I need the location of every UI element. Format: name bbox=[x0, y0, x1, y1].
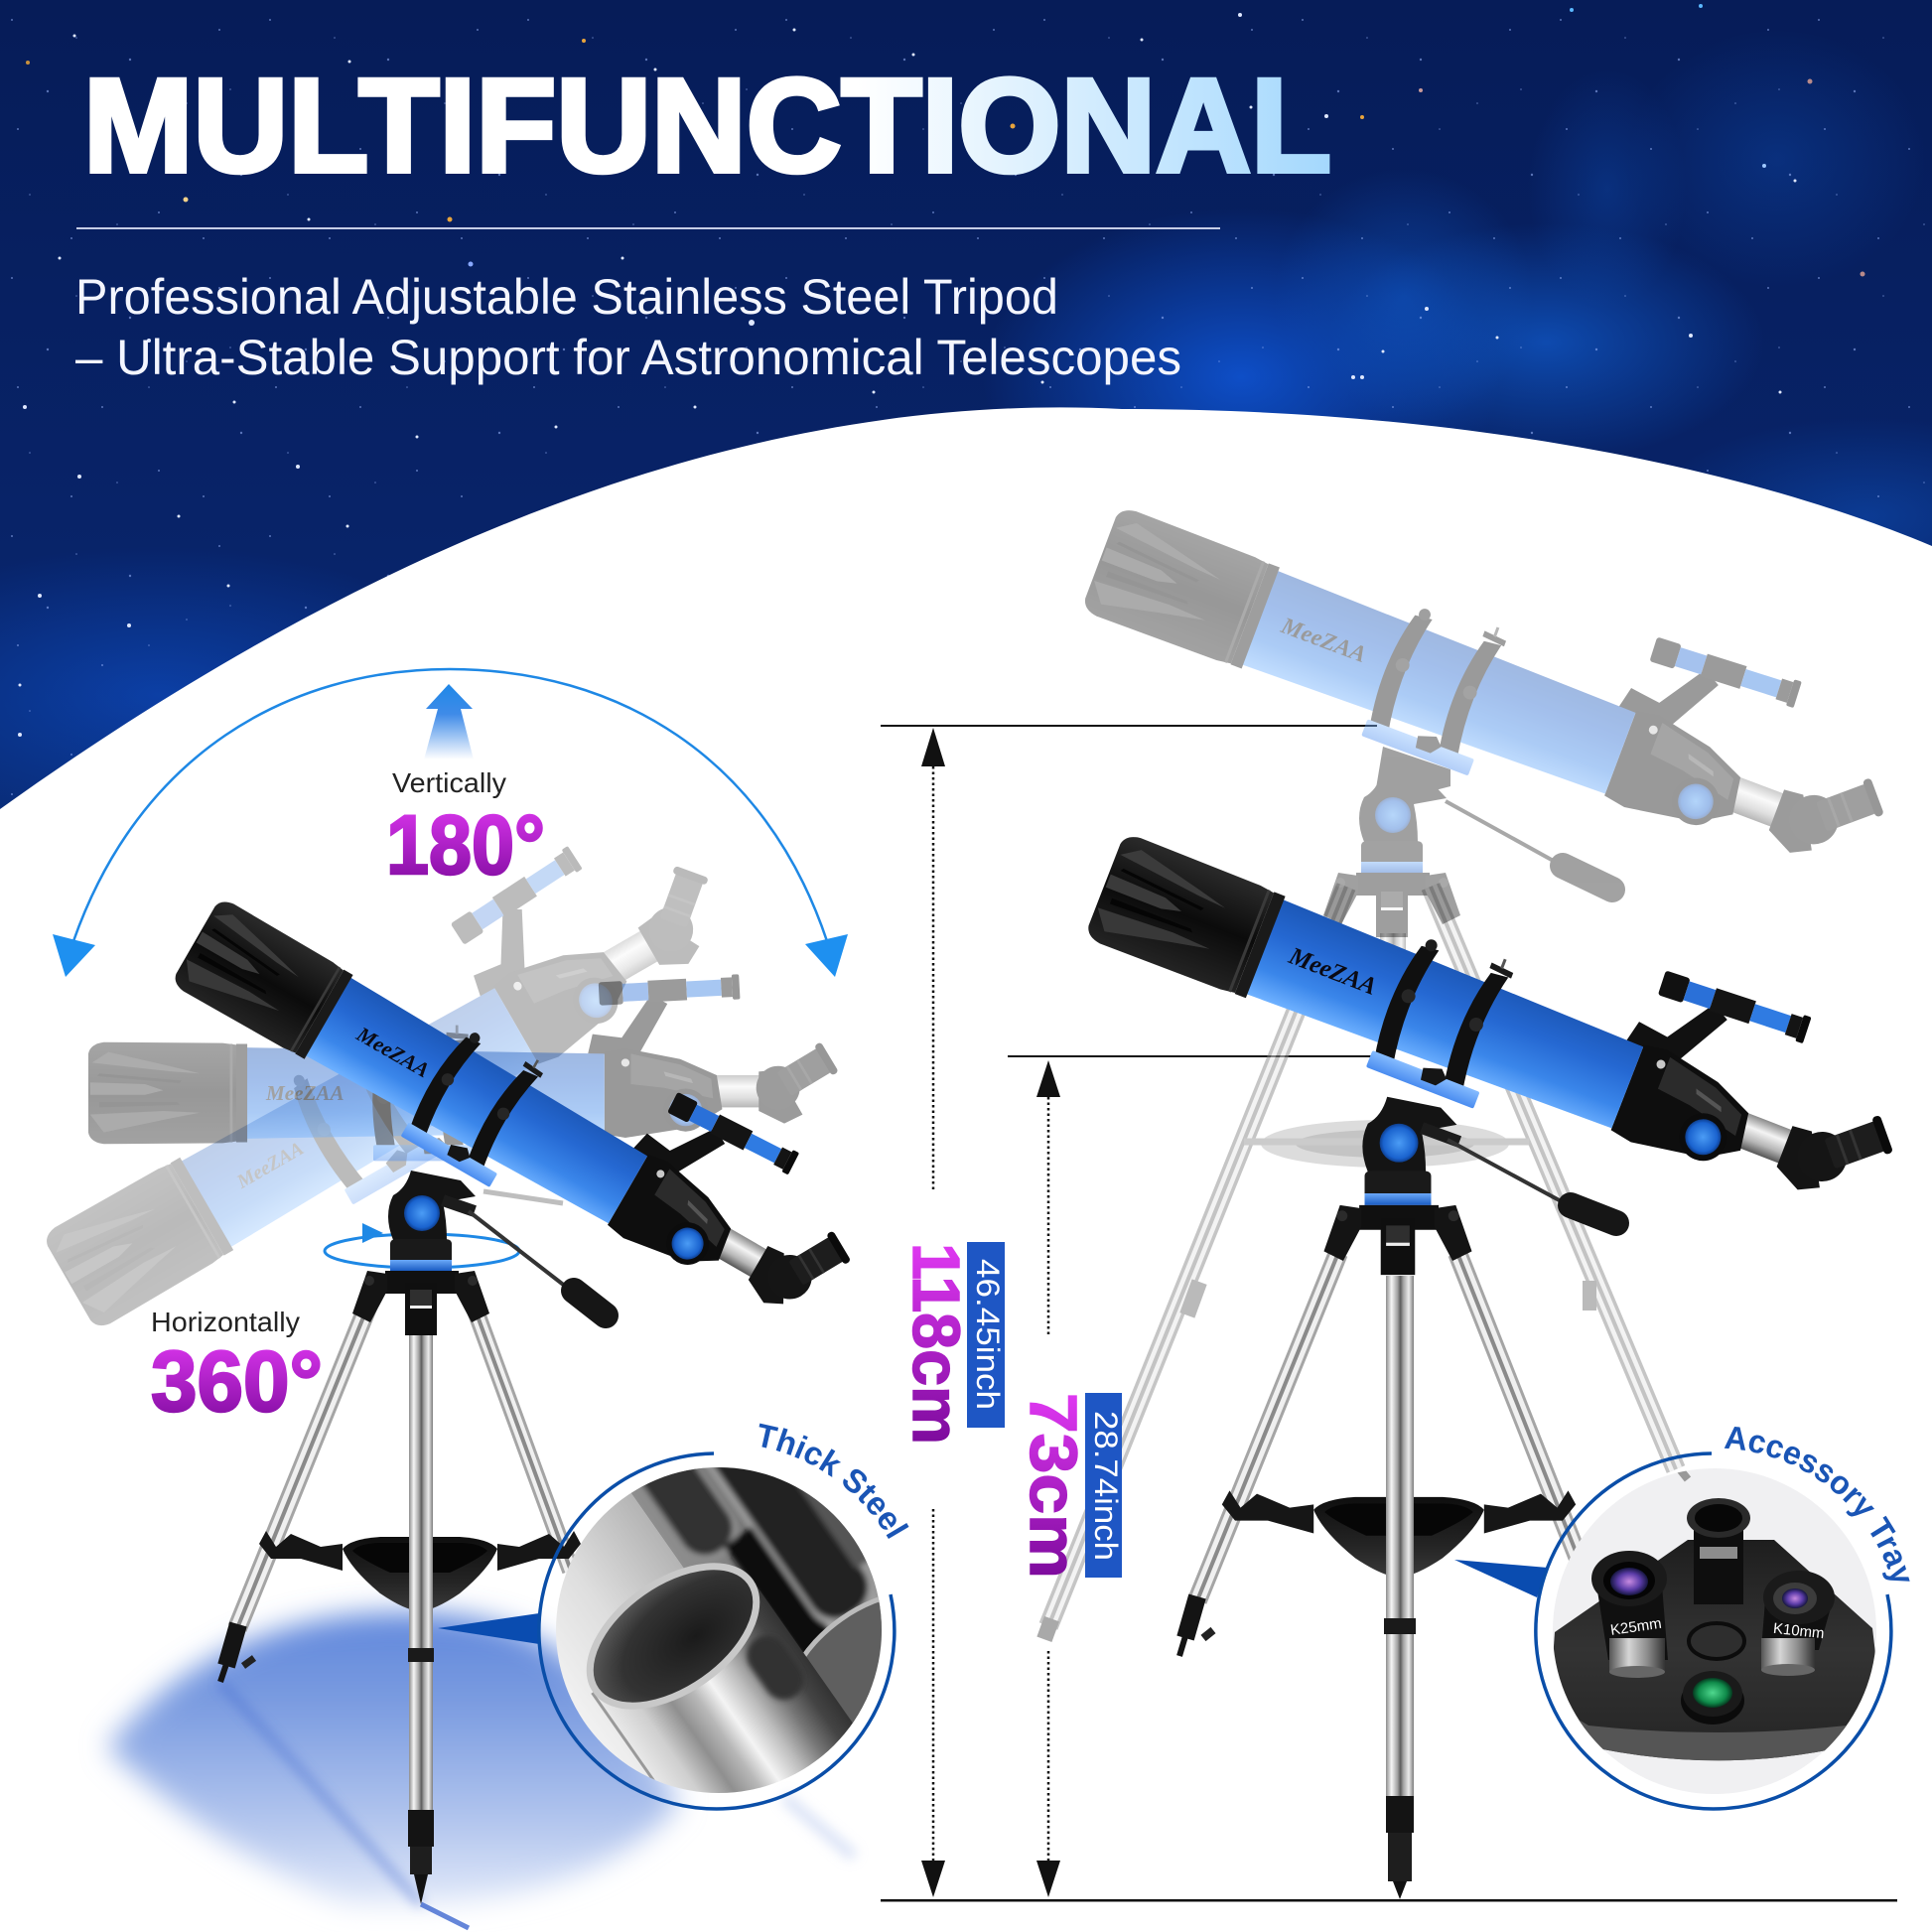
left panning handle bbox=[443, 1200, 606, 1315]
curved label: accessory tray: Accessory Tray bbox=[1724, 1427, 1910, 1582]
barlow lens bbox=[1687, 1498, 1750, 1604]
centre pole bbox=[408, 1320, 434, 1904]
right panning handle bbox=[1422, 1128, 1616, 1223]
height 73cm bbox=[1016, 1393, 1124, 1579]
tripod head bbox=[352, 1171, 489, 1335]
curved label: thick steel: Thick Steel bbox=[759, 1424, 909, 1539]
logo: MeeZAA bbox=[351, 1022, 434, 1082]
logo: MeeZAA bbox=[1285, 942, 1380, 1001]
title: MULTIFUNCTIONAL bbox=[83, 52, 1331, 201]
ghost telescope: horizontal bbox=[88, 974, 841, 1203]
lens cap bbox=[1689, 1623, 1744, 1659]
main left telescope bbox=[162, 838, 864, 1343]
rotation arc with arrows bbox=[53, 669, 848, 977]
K10mm eyepiece bbox=[1761, 1571, 1835, 1676]
green filter bbox=[1681, 1671, 1744, 1725]
icon: up arrow bbox=[424, 684, 474, 759]
main right telescope bbox=[1077, 761, 1908, 1236]
accessory tray bbox=[259, 1531, 581, 1611]
floor shadow under left tripod bbox=[107, 1612, 854, 1928]
centre pole bbox=[1384, 1276, 1416, 1899]
K25mm eyepiece bbox=[1591, 1551, 1668, 1678]
height 73cm: 73cm bbox=[1016, 1393, 1090, 1579]
height 118cm bbox=[898, 1242, 1006, 1445]
tripod head bbox=[1323, 1097, 1472, 1275]
main pipe end bbox=[586, 1563, 760, 1710]
label: vertically: Vertically bbox=[392, 767, 506, 798]
subtitle: Professional Adjustable Stainless Steel Tripod bbox=[75, 269, 1058, 325]
inch badge bbox=[967, 1242, 1006, 1428]
ghost upper mount bbox=[1323, 747, 1460, 937]
eyepiece bbox=[1790, 1110, 1895, 1188]
subtitle: – Ultra-Stable Support for Astronomical Telescopes bbox=[75, 330, 1181, 385]
ghost telescope: upper tilt bbox=[4, 814, 740, 1347]
tripod legs bbox=[1179, 1253, 1579, 1656]
ring outline bbox=[1536, 1453, 1891, 1809]
accessory tray bbox=[1222, 1490, 1576, 1578]
ghost telescope: upper tilt: MeeZAA bbox=[232, 1138, 308, 1193]
left tripod bbox=[220, 1171, 581, 1904]
value: 360 degrees: 360° bbox=[151, 1334, 323, 1430]
main pipe body bbox=[615, 1585, 853, 1793]
inch badge: 46.45inch bbox=[970, 1259, 1006, 1410]
ghost upper telescope bbox=[1074, 436, 1899, 898]
inch badge bbox=[1085, 1393, 1124, 1578]
neighbouring pipe end bbox=[803, 1596, 882, 1737]
callout: thick steel bbox=[538, 1451, 897, 1811]
upper pipes bbox=[631, 1467, 882, 1759]
K25mm eyepiece: K25mm bbox=[1609, 1615, 1663, 1639]
ghost right tripod bbox=[1036, 887, 1676, 1642]
tripod legs bbox=[220, 1303, 571, 1682]
steel detail image bbox=[556, 1467, 882, 1793]
right tripod bbox=[1179, 1097, 1579, 1899]
K10mm eyepiece: K10mm bbox=[1772, 1620, 1825, 1642]
left pale pipe bbox=[556, 1493, 683, 1783]
eyepiece bbox=[759, 1227, 854, 1308]
ghost telescope: horizontal: MeeZAA bbox=[265, 1081, 345, 1105]
title divider bbox=[76, 227, 1220, 229]
label: horizontally: Horizontally bbox=[151, 1307, 300, 1337]
dimension lines bbox=[881, 725, 1897, 1902]
subtitle bbox=[75, 269, 1181, 385]
callout: accessory tray bbox=[1536, 1453, 1891, 1809]
ghost upper telescope: MeeZAA bbox=[1277, 613, 1369, 668]
callout pointer: steel bbox=[438, 1613, 539, 1644]
white curved panel bbox=[0, 407, 1932, 1932]
callout pointer: tray bbox=[1454, 1560, 1548, 1597]
ring outline bbox=[539, 1453, 895, 1809]
tray body bbox=[1551, 1540, 1879, 1760]
height 118cm: 118cm bbox=[898, 1243, 973, 1445]
rotation ellipse arrows bbox=[325, 1223, 519, 1268]
inch badge: 28.74inch bbox=[1088, 1411, 1124, 1561]
tray detail image bbox=[1549, 1459, 1881, 1802]
value: 180 degrees: 180° bbox=[386, 798, 545, 892]
